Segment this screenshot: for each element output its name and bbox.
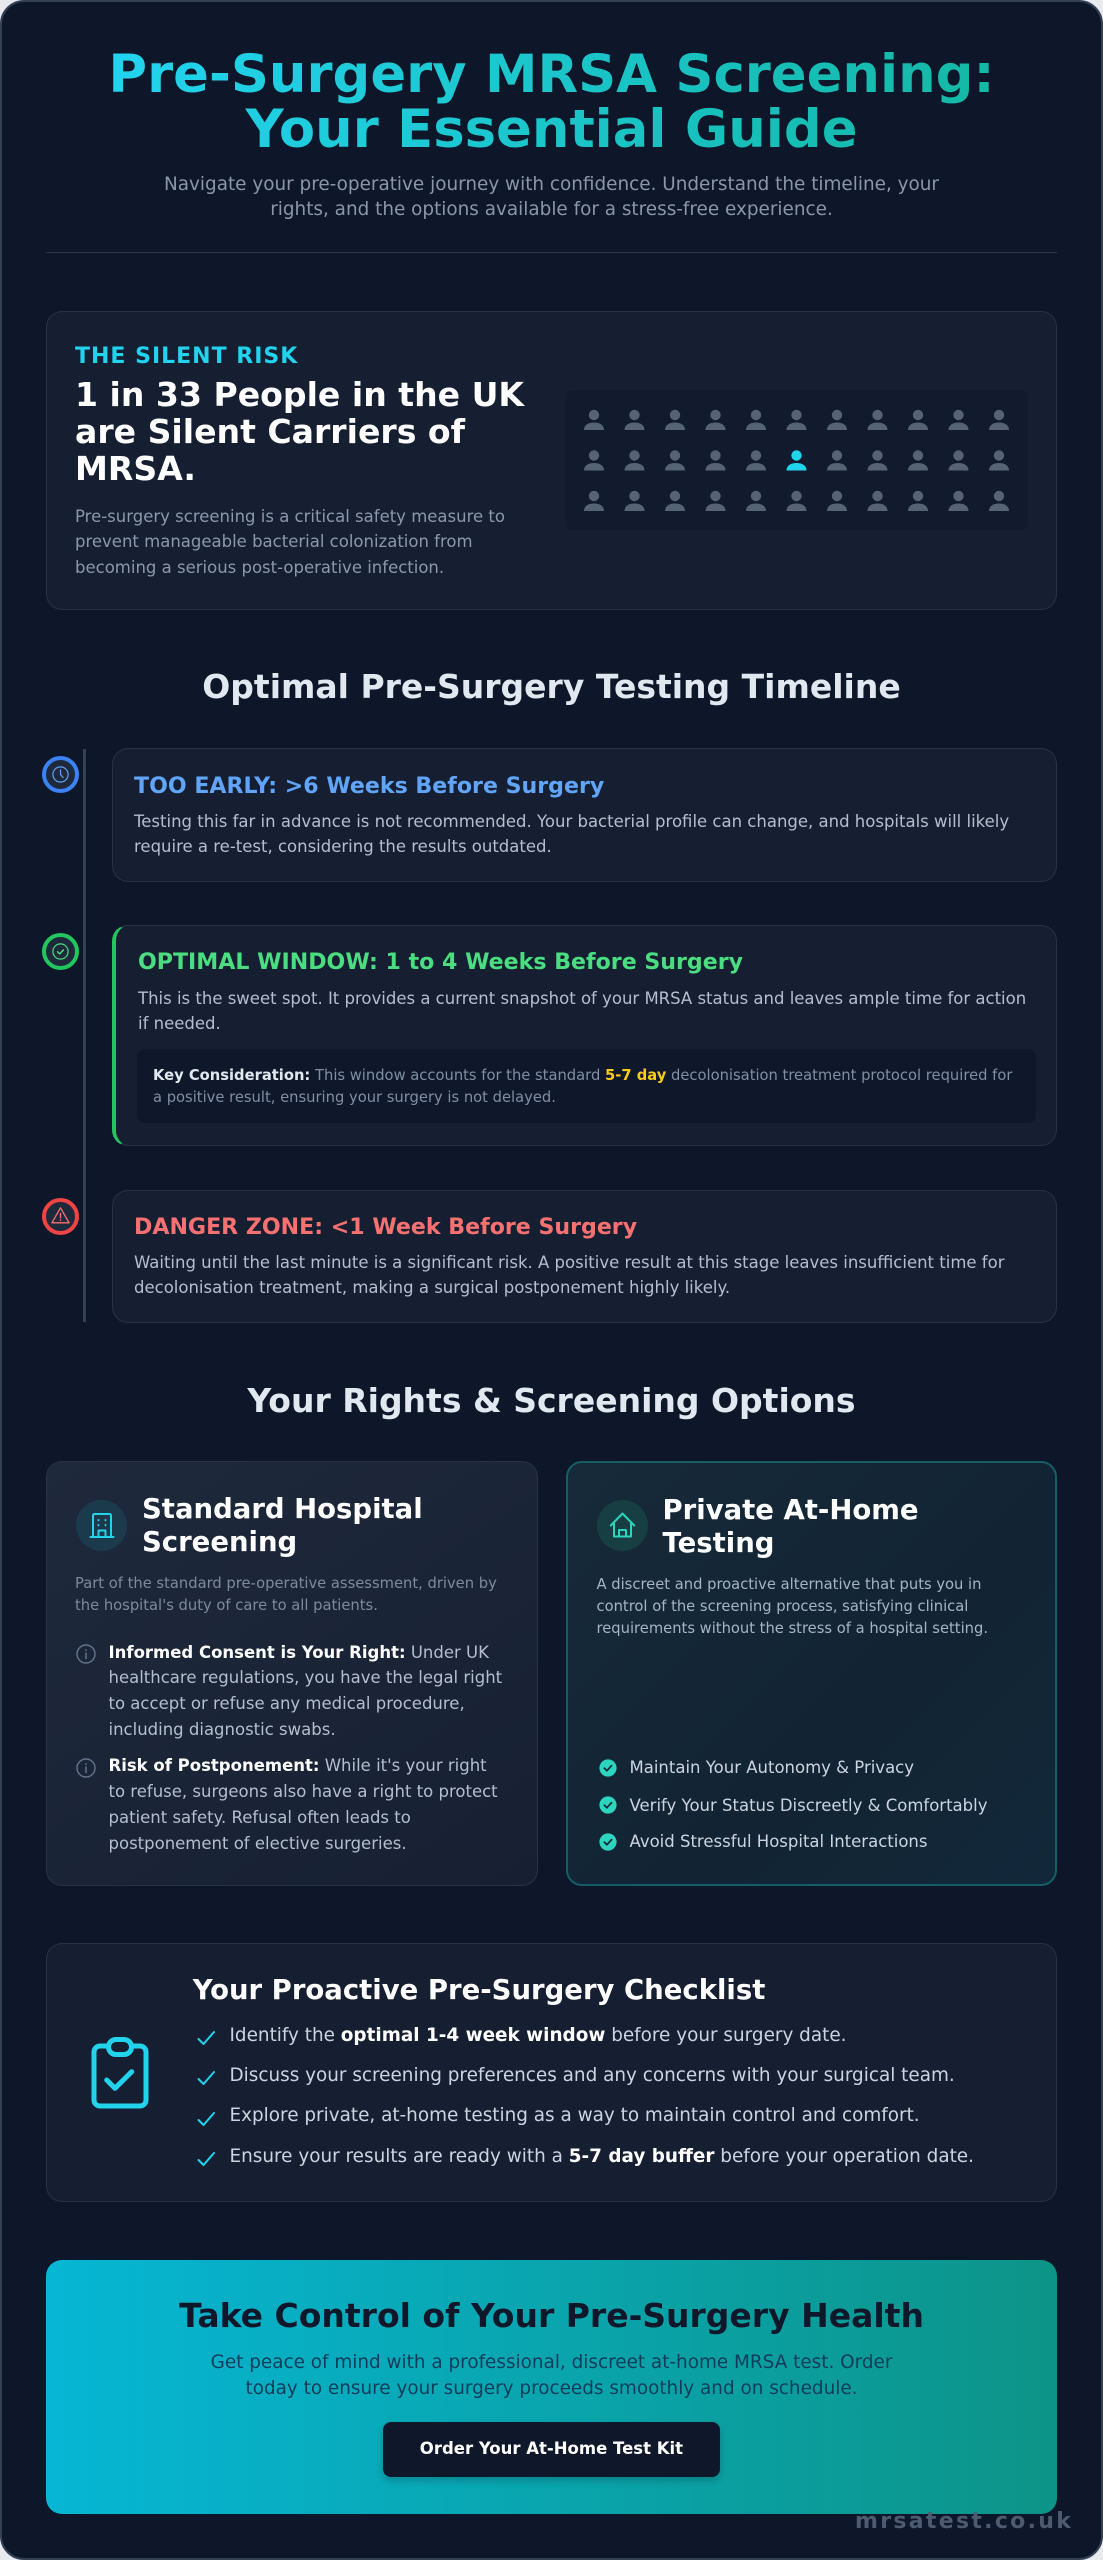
description [75,506,505,577]
icon: warning marker [42,1198,79,1235]
step text: decolonisation treatment, making a surgical postponement highly likely. [134,1278,730,1297]
icon: check badge [599,1796,617,1814]
panel: standard hospital screening [46,1461,538,1886]
cta text: today to ensure your surgery proceeds smoothly and on schedule. [245,2378,858,2399]
statistic heading: are Silent Carriers of [75,412,465,451]
step: danger zone [112,1190,1057,1323]
panel: the silent risk [46,311,1057,610]
step title: TOO EARLY: >6 Weeks Before Surgery [134,773,604,799]
checklist item: Discuss your screening preferences and any concerns with your surgical team. [230,2065,955,2086]
panel title: Private At-Home [662,1494,919,1526]
icon: check badge [599,1833,617,1851]
icon: house [597,1500,648,1551]
checklist item: Ensure your results are ready with a 5-7 day buffer before your operation date. [230,2146,974,2166]
right: risk of postponement: Risk of Postponement: While it's your right [108,1756,487,1775]
checklist item: Explore private, at-home testing as a way to maintain control and comfort. [230,2105,920,2126]
title: Pre-Surgery MRSA Screening: [108,44,995,105]
call to action [46,2260,1057,2514]
step text: Waiting until the last minute is a significant risk. A positive result at this stage leaves insufficient time for [134,1252,1004,1272]
panel: checklist [46,1943,1057,2202]
heading: rights and options: Your Rights & Screening Options [247,1381,856,1420]
statistic heading [75,375,525,488]
button: Order Your At-Home Test Kit [420,2439,683,2458]
watermark: mrsatest.co.uk [855,2508,1073,2534]
checklist item: Identify the optimal 1-4 week window before your surgery date. [230,2024,846,2046]
panel title [662,1494,919,1558]
icon: check marker [42,933,79,970]
title: Your Essential Guide [245,99,858,160]
timeline [42,748,1057,1323]
panel intro: Part of the standard pre-operative assessment, driven by [75,1575,497,1592]
description: prevent manageable bacterial colonization from [75,532,473,551]
icon: tick [198,2152,215,2166]
icon: tick [198,2112,215,2126]
step text: require a re-test, considering the results outdated. [134,837,552,856]
step text [134,1252,1005,1297]
step text: This is the sweet spot. It provides a current snapshot of your MRSA status and leaves ample time for action [138,988,1026,1008]
step title: DANGER ZONE: <1 Week Before Surgery [134,1214,637,1240]
panel intro: the hospital's duty of care to all patients. [75,1597,378,1614]
panel intro: requirements without the stress of a hospital setting. [596,1620,988,1637]
right: risk of postponement: postponement of elective surgeries. [108,1834,407,1853]
description: Pre-surgery screening is a critical safety measure to [75,506,505,526]
right: risk of postponement: patient safety. Refusal often leads to [108,1808,411,1827]
statistic heading: MRSA. [75,449,196,488]
icon: clipboard [92,2037,148,2108]
step: too early [112,748,1057,882]
statistic heading: 1 in 33 People in the UK [75,375,524,414]
panel intro [596,1576,988,1637]
icon: tick [198,2031,215,2045]
right: risk of postponement: to refuse, surgeons also have a right to protect [108,1782,498,1801]
panel: private at-home testing [566,1461,1057,1886]
benefit: Maintain Your Autonomy & Privacy [630,1758,914,1777]
panel title: Standard Hospital [142,1493,423,1525]
callout: key consideration: a positive result, ensuring your surgery is not delayed. [153,1089,556,1106]
chart: people pictogram, 1 in 33 highlighted [565,390,1028,530]
panel title: Screening [142,1526,297,1558]
checklist title: Your Proactive Pre-Surgery Checklist [193,1974,765,2006]
right: informed consent: Informed Consent is Your Right: Under UK [108,1643,489,1662]
step text: if needed. [138,1014,221,1033]
icon: hospital building [76,1500,127,1551]
panel title: Testing [662,1526,774,1558]
cta heading: Take Control of Your Pre-Surgery Health [179,2296,924,2335]
label: the silent risk: THE SILENT RISK [75,344,298,368]
callout: key consideration [137,1049,1036,1123]
cta text [211,2352,892,2399]
heading: timeline: Optimal Pre-Surgery Testing Timeline [202,667,901,706]
right: informed consent: healthcare regulations, you have the legal right [108,1668,502,1687]
panel intro: control of the screening process, satisfying clinical [596,1598,968,1615]
step text: Testing this far in advance is not recommended. Your bacterial profile can change, and hospitals will likely [134,812,1009,831]
icon: info [76,1758,96,1778]
panel intro: A discreet and proactive alternative that puts you in [596,1576,981,1593]
title [46,47,1057,158]
icon: check badge [599,1759,617,1777]
right: risk of postponement [108,1756,498,1853]
button [383,2422,720,2477]
panel title [142,1493,423,1558]
header [46,44,1057,253]
right: informed consent: including diagnostic swabs. [108,1720,336,1739]
step title: OPTIMAL WINDOW: 1 to 4 Weeks Before Surgery [138,949,743,975]
subtitle: rights, and the options available for a stress-free experience. [270,199,833,220]
icon: info [76,1644,96,1664]
callout: key consideration: Key Consideration: This window accounts for the standard 5-7 day decolonisation treatment protocol required for [153,1067,1012,1084]
step text [134,812,1009,856]
benefit list [599,1758,987,1851]
cta text: Get peace of mind with a professional, discreet at-home MRSA test. Order [211,2352,892,2373]
subtitle: Navigate your pre-operative journey with confidence. Understand the timeline, your [164,174,939,194]
panel intro [75,1575,497,1614]
benefit: Verify Your Status Discreetly & Comfortably [630,1796,987,1815]
right: informed consent: to accept or refuse any medical procedure, [108,1694,465,1713]
benefit: Avoid Stressful Hospital Interactions [630,1832,927,1851]
step text [138,988,1026,1033]
subtitle [164,174,939,220]
icon: clock marker [42,756,79,793]
description: becoming a serious post-operative infection. [75,558,444,577]
step: optimal window [112,925,1057,1146]
right: informed consent [108,1643,502,1739]
icon: tick [198,2071,215,2085]
